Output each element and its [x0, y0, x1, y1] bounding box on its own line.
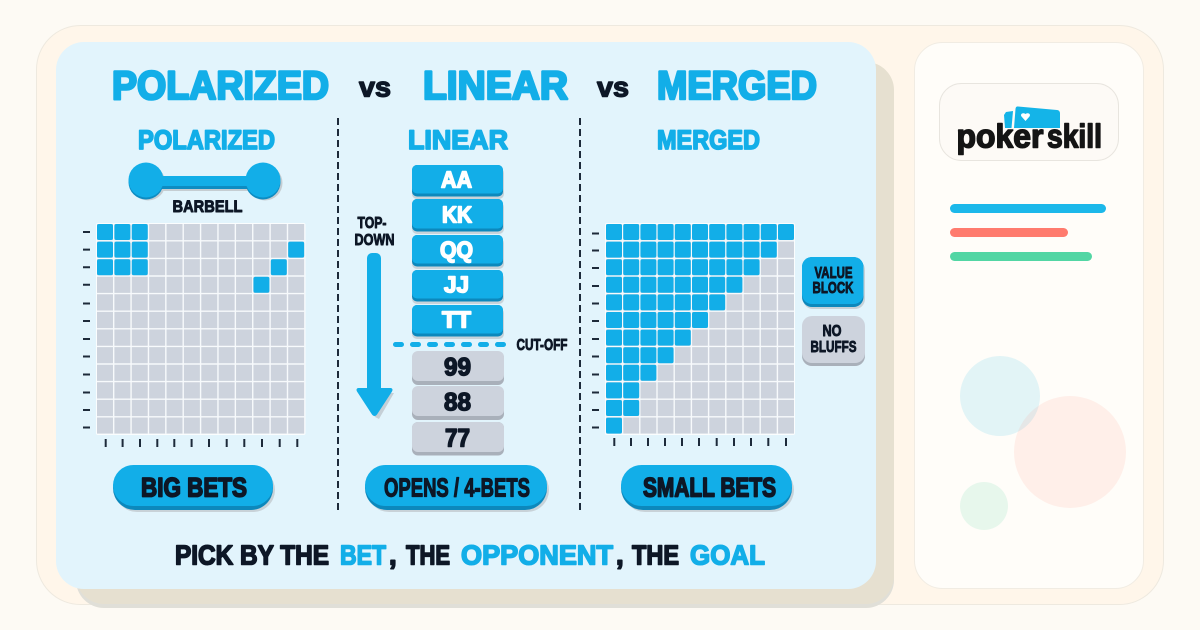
- tag: no bluffs: BLUFFS: [810, 339, 856, 356]
- takeaway line: PICK BY THE: [175, 540, 329, 570]
- hand stack: folded hands: [412, 351, 504, 456]
- arrow: top-down: [356, 253, 394, 419]
- linear heading: LINEAR: [408, 125, 508, 155]
- main panel drop shadow: [76, 62, 894, 608]
- main title: LINEAR: [423, 64, 568, 108]
- pill: small bets: [621, 465, 794, 512]
- tag: value block: VALUE: [814, 265, 852, 282]
- hand stack: value hands: TT: [442, 306, 472, 332]
- main title: [112, 64, 817, 108]
- hand stack: folded hands: 99: [444, 354, 471, 382]
- hand stack: value hands: KK: [442, 202, 472, 228]
- takeaway line: THE: [632, 540, 679, 570]
- hand stack: value hands: JJ: [444, 272, 469, 298]
- tag: value block: BLOCK: [812, 280, 854, 297]
- column dividers: [338, 118, 580, 511]
- hand stack: folded hands: 77: [445, 424, 470, 452]
- main title: vs: [359, 72, 391, 102]
- main title: MERGED: [657, 64, 817, 108]
- side panel: [914, 42, 1144, 588]
- logo: pokerskill: skill: [1047, 118, 1102, 154]
- pill: big bets: [113, 465, 275, 512]
- hand stack: folded hands: 88: [444, 388, 471, 416]
- icon: playing cards: [1004, 106, 1060, 128]
- pill: opens / 4-bets: [365, 465, 549, 512]
- takeaway line: GOAL: [690, 540, 765, 570]
- cut-off line: [396, 342, 506, 347]
- pill: small bets: SMALL BETS: [643, 472, 776, 502]
- logo: pokerskill: poker: [956, 118, 1044, 154]
- column: polarized: [83, 125, 306, 512]
- top-down label: TOP-: [358, 215, 386, 232]
- range grid: polarized: [83, 223, 306, 447]
- merged heading: MERGED: [657, 125, 760, 155]
- tag: value block: [802, 257, 865, 309]
- hand stack: value hands: [412, 165, 504, 339]
- hand stack: value hands: AA: [441, 166, 472, 192]
- takeaway line: ,: [616, 540, 624, 570]
- main infographic panel: [56, 42, 876, 589]
- cut-off label: CUT-OFF: [516, 337, 568, 354]
- range grid: merged: [592, 223, 795, 446]
- icon: barbell: [128, 162, 282, 200]
- logo: pokerskill: [940, 84, 1118, 160]
- pill: opens / 4-bets: OPENS / 4-BETS: [384, 472, 530, 502]
- takeaway line: THE: [406, 540, 450, 570]
- main title: POLARIZED: [112, 64, 329, 108]
- takeaway line: OPPONENT: [461, 540, 613, 570]
- tag: no bluffs: [802, 316, 865, 366]
- takeaway line: BET: [340, 540, 386, 570]
- barbell label: BARBELL: [172, 197, 242, 216]
- decorative circles: [960, 356, 1126, 530]
- hand stack: value hands: QQ: [440, 236, 473, 262]
- polarized heading: POLARIZED: [138, 125, 275, 155]
- takeaway line: [175, 540, 765, 570]
- column: merged: [592, 125, 865, 512]
- pill: big bets: BIG BETS: [141, 472, 247, 502]
- column: linear: [354, 125, 568, 512]
- takeaway line: ,: [389, 540, 397, 570]
- decorative legend bars: [950, 204, 1106, 261]
- tag: no bluffs: NO: [822, 323, 842, 340]
- top-down label: DOWN: [354, 232, 394, 249]
- top-down label: [354, 215, 394, 249]
- main title: vs: [597, 72, 629, 102]
